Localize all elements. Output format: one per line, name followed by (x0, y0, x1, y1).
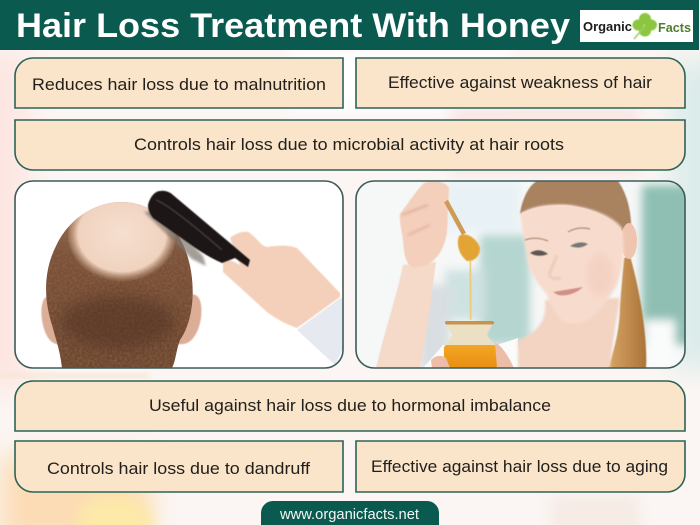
header band (0, 0, 699, 50)
eyes (530, 250, 548, 256)
shirt (423, 338, 518, 368)
benefit box: malnutrition: Reduces hair loss due to malnutrition (32, 76, 326, 94)
lips (553, 287, 583, 295)
brows (525, 228, 590, 241)
benefit box: hormonal imbalance (15, 381, 685, 431)
brush bristles (144, 210, 206, 266)
footer: website: www.organicfacts.net (279, 507, 419, 523)
raised hand (400, 181, 449, 267)
benefit box: dandruff: Controls hair loss due to dandruff (47, 460, 310, 478)
hand (223, 232, 340, 328)
hair (520, 181, 631, 232)
cheek shading (589, 256, 611, 294)
benefit box: hormonal imbalance: Useful against hair loss due to hormonal imbalance (149, 397, 551, 415)
honey jar (444, 321, 497, 369)
benefit box: aging (356, 441, 685, 492)
benefit box: weakness: Effective against weakness of hair (388, 74, 653, 92)
nose shadow (549, 255, 561, 279)
benefit box: malnutrition (15, 58, 343, 108)
benefit box: weakness (356, 58, 685, 108)
ear (621, 223, 637, 259)
ears (41, 294, 201, 344)
honey drip (470, 260, 471, 320)
head hair (46, 202, 193, 368)
face (520, 205, 624, 324)
logo: Organic Facts: Facts (658, 20, 691, 35)
shirt collar (72, 360, 162, 368)
brush (148, 191, 250, 267)
arm (376, 262, 436, 368)
benefit box: dandruff (15, 441, 343, 492)
honey dipper stick (446, 201, 464, 234)
sleeve (297, 297, 343, 365)
benefit box: aging: Effective against hair loss due to aging (371, 458, 668, 476)
footer: website (261, 501, 439, 525)
photo: balding head with brush (15, 181, 343, 368)
photo: woman with honey (356, 181, 692, 370)
honey dipper head (458, 234, 480, 261)
blurred window background (420, 181, 692, 370)
handle tip (245, 261, 263, 281)
fingers (431, 343, 514, 368)
bald spot (68, 202, 176, 281)
ponytail (608, 256, 646, 368)
title: Hair Loss Treatment With Honey (16, 7, 570, 45)
neck and chest (518, 298, 620, 368)
logo: Organic Facts (580, 10, 693, 42)
benefit box: microbial activity (15, 120, 685, 170)
benefit box: microbial activity: Controls hair loss due to microbial activity at hair roots (134, 136, 564, 154)
logo: Organic Facts: Organic (583, 19, 632, 34)
icon: clover (632, 13, 657, 39)
